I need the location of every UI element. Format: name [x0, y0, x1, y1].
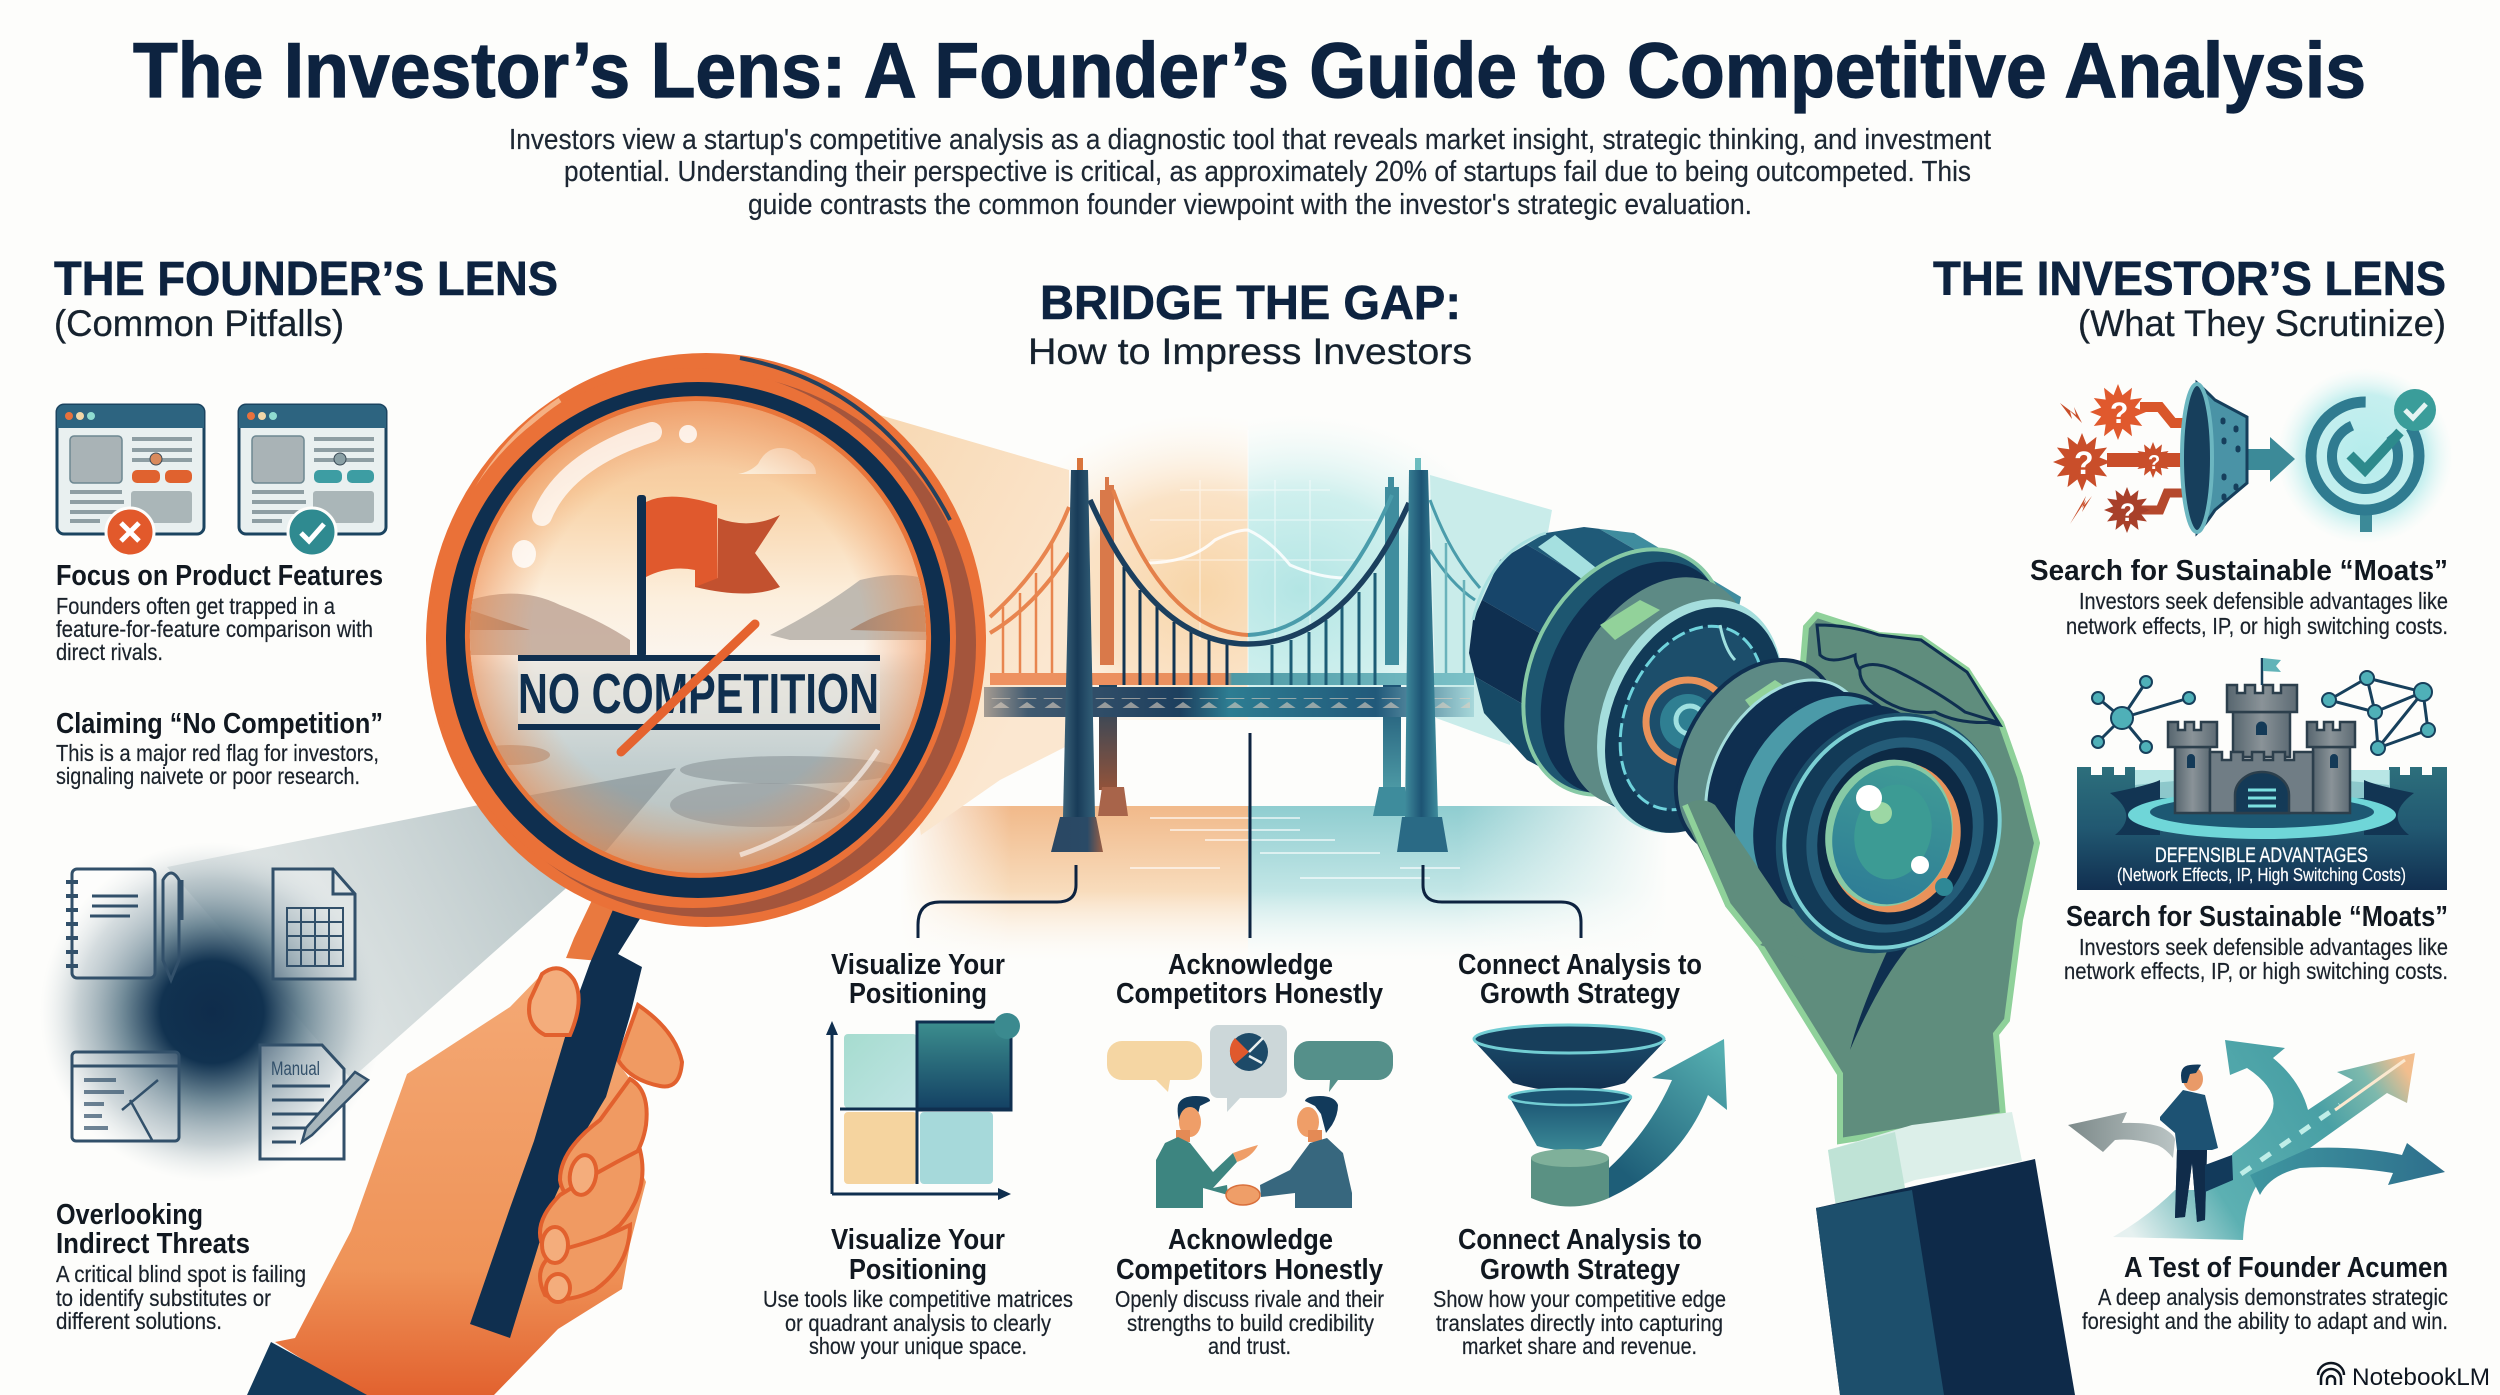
road deck	[990, 673, 1474, 685]
front left tower	[1051, 458, 1103, 852]
column description: or quadrant analysis to clearly	[785, 1310, 1051, 1336]
rear right tower	[1373, 477, 1408, 816]
fingers wrapping handle	[540, 1079, 647, 1302]
column title: Growth Strategy	[1480, 978, 1680, 1010]
heading: THE INVESTOR’S LENS	[1933, 253, 2446, 306]
icon: feature comparison right	[239, 405, 386, 556]
column title: Connect Analysis to	[1458, 949, 1702, 981]
column: acknowledge competitors honestly	[1107, 949, 1393, 1359]
text: test of founder acumen	[2082, 1252, 2448, 1334]
lens frame	[426, 353, 986, 927]
text: overlooking indirect threats	[56, 1199, 306, 1334]
quadrant chart	[826, 1013, 1020, 1200]
icon: spreadsheet document	[273, 869, 355, 979]
connector lines from bridge to columns	[918, 733, 1581, 938]
text: test of founder acumen: A Test of Founder Acumen	[2124, 1252, 2448, 1284]
networks	[2092, 671, 2435, 755]
suit sleeve	[1816, 1159, 2075, 1395]
rear left tower	[1098, 477, 1128, 816]
column description: Show how your competitive edge	[1433, 1286, 1726, 1312]
icon: manual document and pencil: Manual	[271, 1059, 320, 1080]
column: connect analysis to growth	[1433, 949, 1727, 1359]
notebooklm badge: NotebookLM	[2352, 1364, 2490, 1391]
rear ring	[1483, 514, 1767, 830]
text: overlooking indirect threats: Overlooking	[56, 1199, 203, 1231]
intro paragraph	[509, 124, 1991, 221]
text: claiming no competition: This is a major red flag for investors,	[56, 740, 379, 766]
column description	[1115, 1224, 1384, 1359]
text: focus on product features: direct rivals.	[56, 639, 163, 665]
column title: Visualize Your	[831, 949, 1005, 981]
column title: Competitors Honestly	[1116, 978, 1383, 1010]
column description: Use tools like competitive matrices	[763, 1286, 1073, 1312]
intro paragraph: guide contrasts the common founder viewpoint with the investor's strategic evaluation.	[748, 189, 1752, 221]
column description: Positioning	[849, 1254, 987, 1286]
icon: manual document and pencil	[260, 1045, 368, 1159]
text: sustainable moats: network effects, IP, or high switching costs.	[2066, 613, 2448, 639]
icon: castle and moat panel	[2077, 658, 2447, 890]
column description: Acknowledge	[1168, 1224, 1333, 1256]
column title	[1458, 949, 1702, 1010]
icon: filter to validated target: ?	[2148, 452, 2160, 474]
heading: THE FOUNDER’S LENS	[54, 253, 558, 306]
column title	[1116, 949, 1383, 1010]
circuit disc	[1571, 579, 1817, 861]
fingers	[1817, 625, 2000, 725]
illustration: handshake conversation	[1107, 1025, 1393, 1208]
side span hangers	[1003, 543, 1052, 674]
back barrel	[1469, 527, 1741, 807]
investor's lens column	[1933, 253, 2453, 1334]
column description: Competitors Honestly	[1116, 1254, 1383, 1286]
column description	[1433, 1224, 1726, 1359]
lens view	[460, 396, 940, 890]
telescope and investor hand	[1264, 321, 2075, 1395]
thumb	[1685, 800, 1805, 960]
blind-spot grey beam and dark blob	[40, 768, 678, 1182]
thumb	[529, 968, 579, 1035]
side span cables	[990, 507, 1069, 633]
text: sustainable moats: Investors seek defensible advantages like	[2079, 588, 2448, 614]
no competition sign: NO COMPETITION	[518, 662, 879, 726]
icon: feature comparison wrong	[57, 405, 204, 556]
column description: Growth Strategy	[1480, 1254, 1680, 1286]
text: overlooking indirect threats: A critical blind spot is failing	[56, 1261, 306, 1287]
heading: (Common Pitfalls)	[54, 303, 344, 344]
hand palm	[275, 974, 646, 1395]
column title: Positioning	[849, 978, 987, 1010]
light beam: teal from telescope	[1430, 475, 1552, 745]
lens neck	[566, 896, 622, 963]
icon: founder at crossroads	[2068, 1040, 2445, 1240]
intro paragraph: potential. Understanding their perspective is critical, as approximately 20% of startups fail due to being outcompeted. This	[564, 156, 1971, 188]
bridge backdrop glow and water	[900, 410, 1668, 961]
bridge the gap heading	[1028, 277, 1472, 372]
collar	[1527, 545, 1789, 839]
front right tower	[1397, 458, 1448, 852]
shirt cuff	[1828, 1112, 2022, 1207]
text: focus on product features	[56, 560, 383, 665]
panel caption: (Network Effects, IP, High Switching Costs)	[2117, 865, 2406, 885]
icon: filter to validated target: ?	[2120, 499, 2135, 527]
handle	[470, 905, 646, 1338]
text: overlooking indirect threats: different solutions.	[56, 1308, 222, 1334]
founder's lens column	[54, 253, 558, 1334]
front barrel	[1643, 631, 1974, 949]
column title: Acknowledge	[1168, 949, 1333, 981]
column description: strengths to build credibility	[1127, 1310, 1374, 1336]
heading	[1933, 253, 2446, 344]
bridge the gap heading: BRIDGE THE GAP:	[1040, 277, 1461, 330]
intro paragraph: Investors view a startup's competitive analysis as a diagnostic tool that reveals market insight, strategic thinking, and investment	[509, 124, 1991, 156]
column description: Openly discuss rivale and their	[1115, 1286, 1384, 1312]
column: visualize your positioning	[763, 949, 1073, 1359]
distant hills	[470, 594, 630, 655]
cloud	[738, 448, 816, 474]
column title	[831, 949, 1005, 1010]
text: focus on product features: Founders often get trapped in a	[56, 593, 335, 619]
no competition sign	[518, 624, 880, 752]
icon: notebook and pen	[66, 869, 182, 980]
column description: and trust.	[1208, 1333, 1291, 1359]
text: sustainable moats	[2030, 555, 2448, 639]
column description: translates directly into capturing	[1436, 1310, 1723, 1336]
column description: market share and revenue.	[1462, 1333, 1697, 1359]
glass highlights	[542, 432, 652, 516]
icon: filter to validated target: ?	[2110, 397, 2128, 430]
moat panel	[2077, 767, 2447, 890]
text: claiming no competition	[56, 708, 383, 789]
column description: show your unique space.	[809, 1333, 1027, 1359]
icon: filter to validated target: ?	[2074, 445, 2094, 481]
column description: Connect Analysis to	[1458, 1224, 1702, 1256]
heading: (What They Scrutinize)	[2078, 303, 2446, 344]
magnifying glass and founder hand	[247, 353, 986, 1395]
text: sustainable moats repeat	[2064, 901, 2448, 984]
icon: red flag	[637, 495, 780, 657]
water streaks	[680, 756, 900, 784]
bridge the gap heading: How to Impress Investors	[1028, 331, 1472, 372]
column description: Visualize Your	[831, 1224, 1005, 1256]
text: test of founder acumen: A deep analysis demonstrates strategic	[2098, 1284, 2448, 1310]
text: claiming no competition: signaling naivete or poor research.	[56, 763, 360, 789]
text: sustainable moats repeat: Search for Sustainable “Moats”	[2066, 901, 2448, 933]
text: focus on product features: feature-for-feature comparison with	[56, 616, 373, 642]
lens glass	[1732, 672, 2044, 994]
heading	[54, 253, 558, 344]
text: test of founder acumen: foresight and the ability to adapt and win.	[2082, 1308, 2448, 1334]
index finger	[618, 1005, 682, 1086]
light beam: orange from magnifier	[852, 407, 1069, 835]
sleeve cuff	[247, 1342, 367, 1395]
truss deck	[984, 687, 1474, 717]
icon: filter to validated target	[2053, 368, 2453, 544]
hand palm	[1685, 615, 2037, 1141]
icon: browser window with chart	[72, 1052, 179, 1141]
text: overlooking indirect threats: to identify substitutes or	[56, 1285, 271, 1311]
main cable	[1090, 500, 1409, 644]
text: sustainable moats repeat: Investors seek defensible advantages like	[2079, 934, 2448, 960]
panel caption	[2117, 844, 2406, 885]
text: focus on product features: Focus on Product Features	[56, 560, 383, 592]
main hangers	[1124, 567, 1227, 685]
text: overlooking indirect threats: Indirect Threats	[56, 1228, 250, 1260]
bridge illustration	[984, 458, 1480, 852]
icon: funnel and growth arrow	[1473, 1025, 1727, 1206]
castle	[2168, 685, 2355, 813]
text: claiming no competition: Claiming “No Competition”	[56, 708, 383, 740]
panel caption: DEFENSIBLE ADVANTAGES	[2155, 844, 2368, 867]
rear cables	[1113, 490, 1248, 635]
text: sustainable moats repeat: network effects, IP, or high switching costs.	[2064, 958, 2448, 984]
title: The Investor’s Lens: A Founder’s Guide to Competitive Analysis	[133, 26, 2366, 114]
column description	[763, 1224, 1073, 1359]
text: sustainable moats: Search for Sustainable “Moats”	[2030, 555, 2448, 587]
